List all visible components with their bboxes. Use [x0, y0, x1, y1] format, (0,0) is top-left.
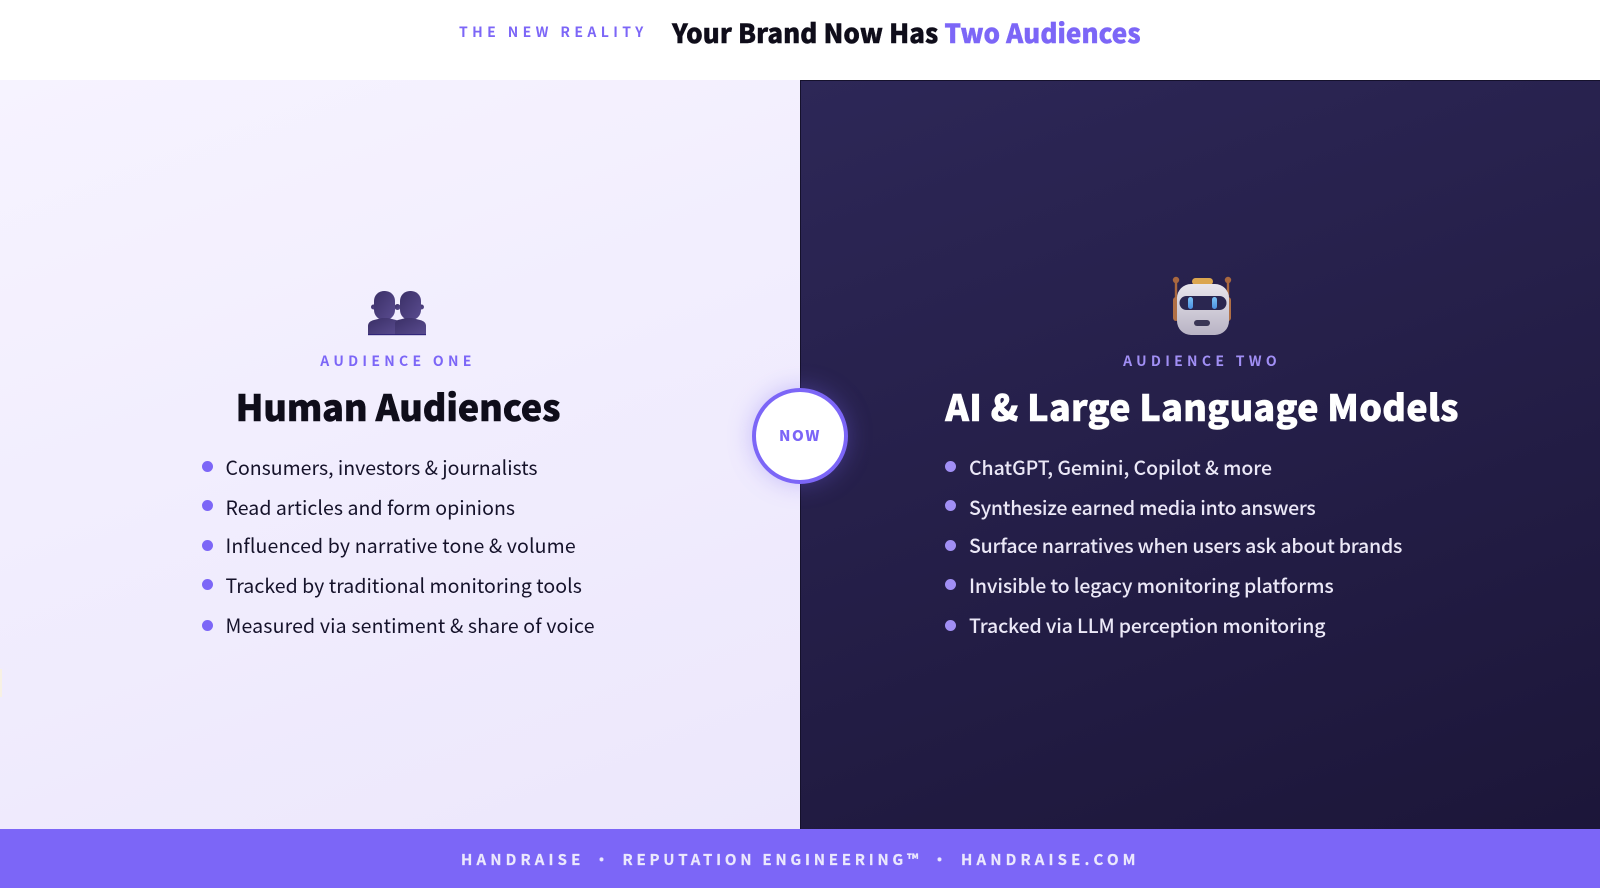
- footer: separator: ·: [932, 849, 947, 870]
- footer: [0, 829, 1600, 888]
- footer: brand: HANDRAISE: [461, 849, 585, 870]
- heading: AI and LLMs: AI & Large Language Models: [945, 380, 1459, 432]
- bullet 5: Tracked via LLM perception monitoring: [969, 610, 1325, 639]
- edge tick: [0, 669, 2, 697]
- list: AI bullets: [945, 452, 1402, 639]
- footer: url: HANDRAISE.COM: [961, 849, 1140, 870]
- bullet 5: Measured via sentiment & share of voice: [226, 610, 595, 639]
- bullet 1: ChatGPT, Gemini, Copilot & more: [969, 452, 1272, 481]
- bullet 2: Synthesize earned media into answers: [969, 492, 1316, 520]
- title: Your Brand Now Has Two Audiences: [672, 14, 1141, 51]
- icon: two people: [368, 291, 426, 336]
- panel: AI and large language models: [800, 80, 1600, 829]
- bullet 4: Tracked by traditional monitoring tools: [226, 570, 582, 599]
- icon: robot: [1172, 276, 1232, 335]
- bullet 2: Read articles and form opinions: [226, 492, 515, 520]
- panel: human audiences: [0, 80, 800, 829]
- bullet 1: Consumers, investors & journalists: [226, 452, 538, 481]
- footer: tagline: REPUTATION ENGINEERING™: [622, 849, 922, 870]
- header: [0, 0, 1600, 80]
- footer: separator: ·: [594, 849, 609, 870]
- bullet 4: Invisible to legacy monitoring platforms: [969, 570, 1334, 599]
- bullet 3: Influenced by narrative tone & volume: [226, 530, 576, 559]
- bullet 3: Surface narratives when users ask about brands: [969, 530, 1402, 559]
- badge: now: NOW: [779, 425, 821, 446]
- heading: human audiences: Human Audiences: [236, 380, 560, 432]
- eyebrow: the new reality: THE NEW REALITY: [459, 22, 648, 42]
- eyebrow: audience two: AUDIENCE TWO: [1123, 351, 1281, 371]
- badge: now: [752, 388, 848, 484]
- list: human audience bullets: [202, 452, 595, 639]
- eyebrow: audience one: AUDIENCE ONE: [320, 351, 476, 371]
